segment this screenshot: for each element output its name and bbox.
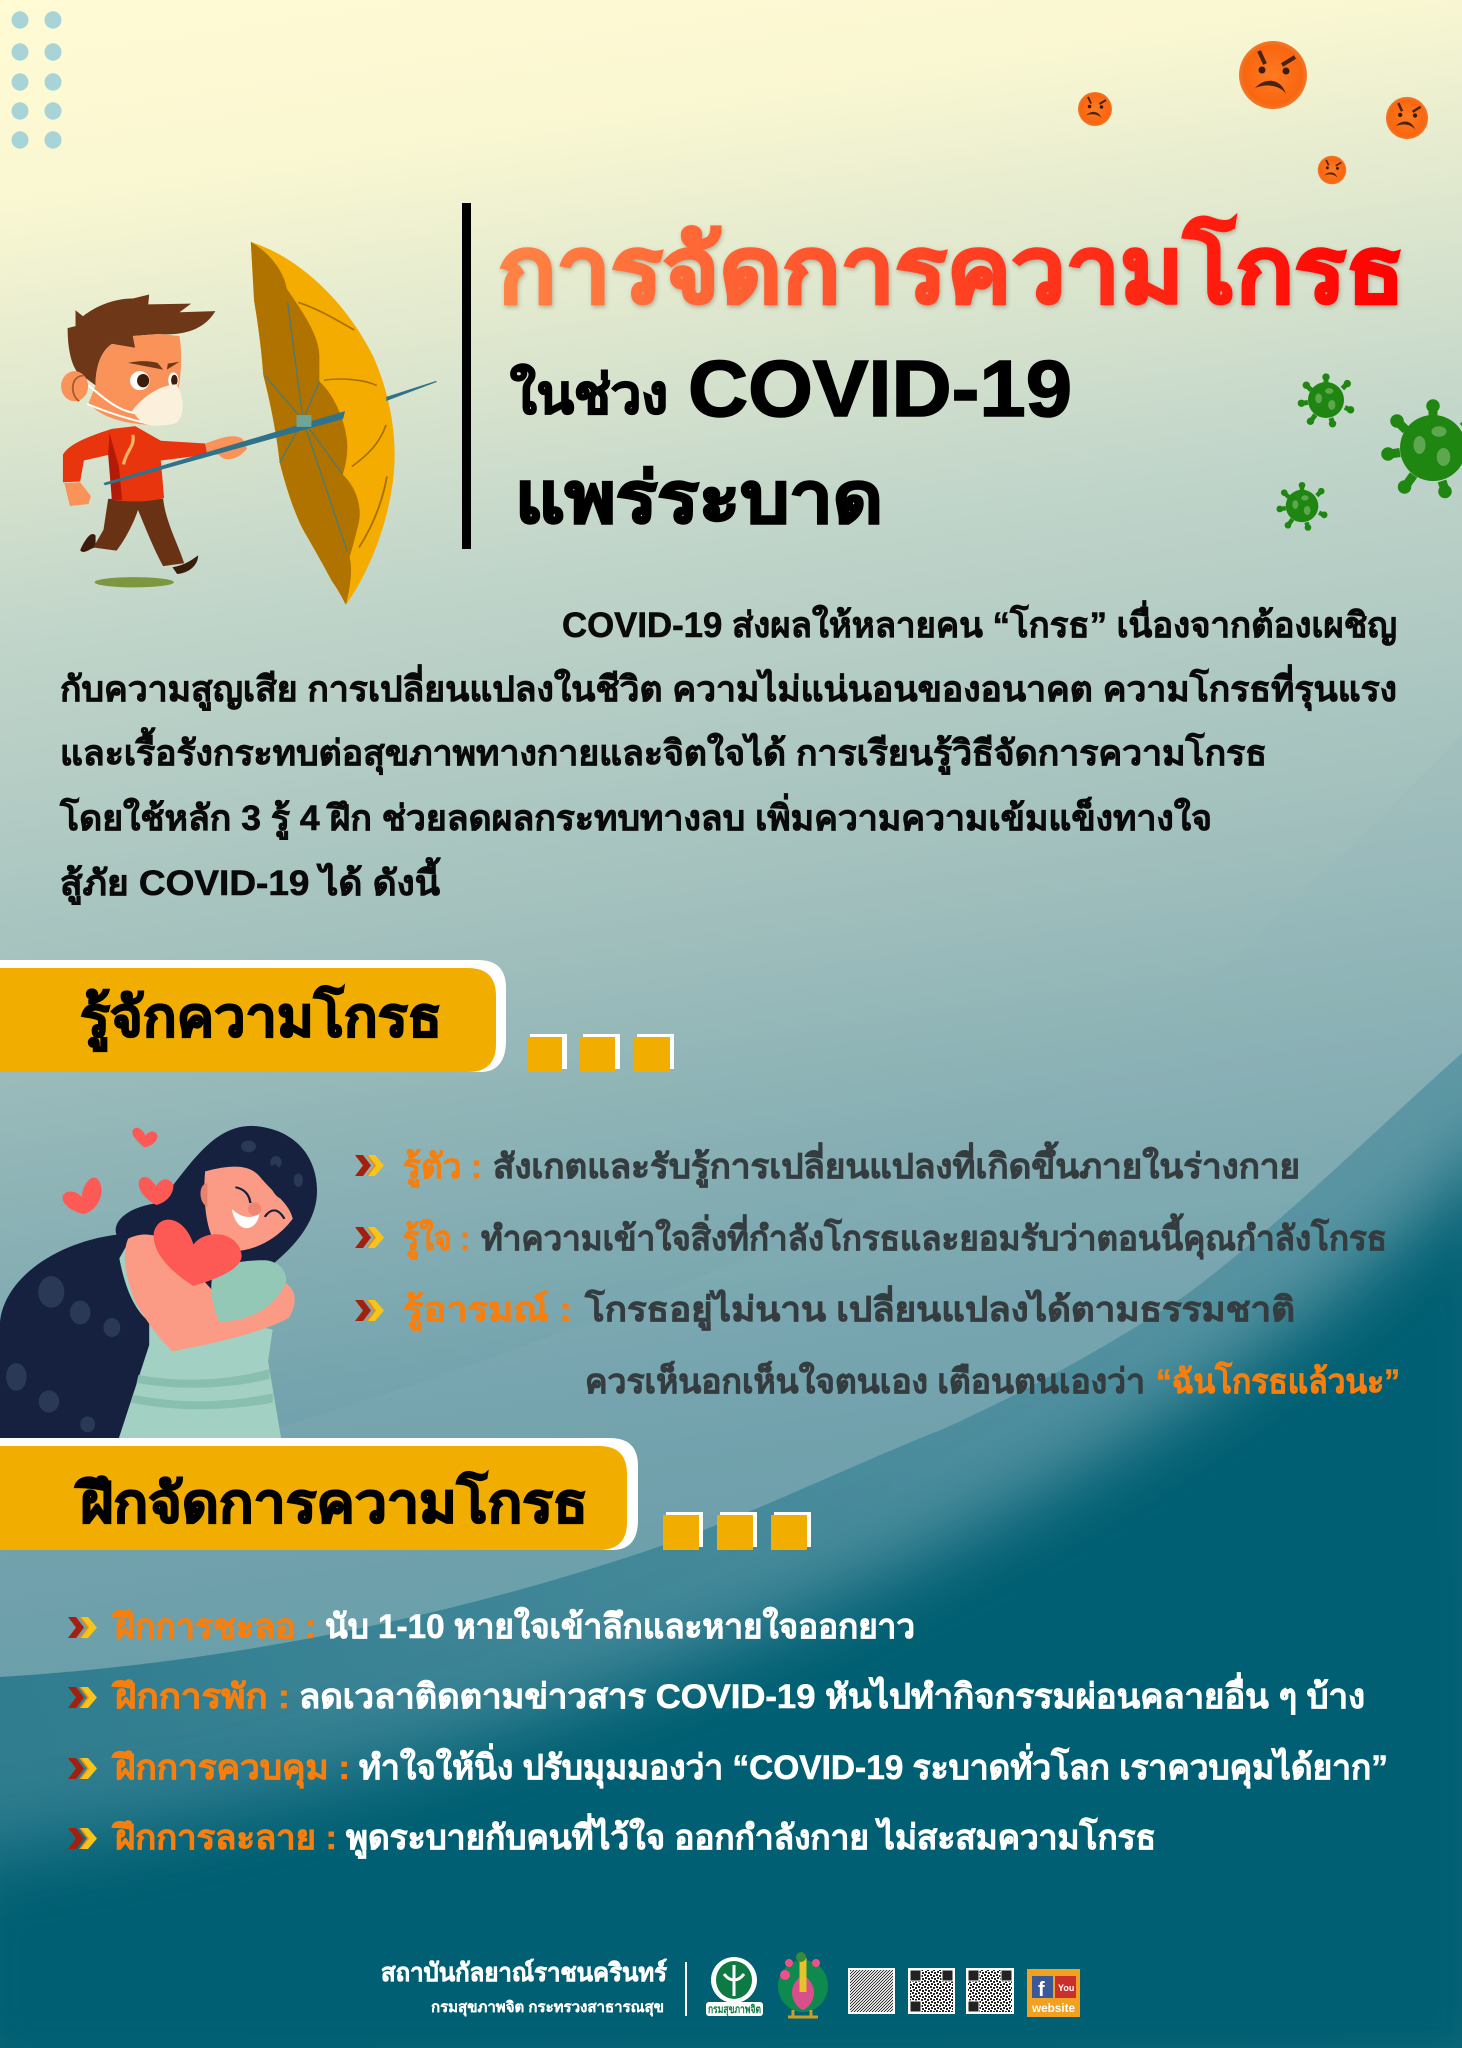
icon: social media website box: website <box>1031 2001 1075 2015</box>
text block: introduction: กับความสูญเสีย การเปลี่ยนแปลงในชีวิต ความไม่แน่นอนของอนาคต ความโกรธที่รุนแรง <box>60 664 1397 711</box>
heading: know your anger: รู้จักความโกรธ <box>80 985 442 1052</box>
item: know mind: รู้ใจ : <box>403 1218 470 1260</box>
item: rest: ฝึกการพัก : <box>111 1678 290 1716</box>
text block: introduction: COVID-19 ส่งผลให้หลายคน “โกรธ” เนื่องจากต้องเผชิญ <box>562 600 1397 646</box>
icon: social media website box: f <box>1038 1979 1045 2001</box>
decorative dots <box>12 11 62 149</box>
item: know emotion: รู้อารมณ์ : <box>403 1290 572 1331</box>
list: know your anger items <box>355 1141 1400 1401</box>
icon: green viruses <box>1276 373 1462 531</box>
item: release: พูดระบายกับคนที่ไว้ใจ ออกกำลังกาย ไม่สะสมความโกรธ <box>346 1813 1156 1859</box>
item: know emotion: โกรธอยู่ไม่นาน เปลี่ยนแปลงได้ตามธรรมชาติ <box>584 1285 1295 1331</box>
text block: introduction: โดยใช้หลัก 3 รู้ 4 ฝึก ช่วยลดผลกระทบทางลบ เพิ่มความความเข้มแข็งทางใจ <box>59 793 1212 840</box>
illustration: woman hugging heart <box>0 1126 317 1438</box>
footer <box>381 1952 1080 2017</box>
icon: three squares <box>527 1034 674 1072</box>
item: know body: รู้ตัว : <box>403 1148 482 1188</box>
item: slow down: นับ 1-10 หายใจเข้าลึกและหายใจออกยาว <box>325 1606 915 1646</box>
list: practice items <box>68 1606 1388 1859</box>
panel: practice anger management banner <box>0 1438 811 1550</box>
text block: introduction: และเรื้อรังกระทบต่อสุขภาพทางกายและจิตใจได้ การเรียนรู้วิธีจัดการความโกรธ <box>60 727 1267 775</box>
text block: introduction <box>59 600 1397 905</box>
icon: angry emoji faces <box>1078 41 1428 184</box>
heading: outbreak: แพร่ระบาด <box>515 459 883 537</box>
text: institute name: สถาบันกัลยาณ์ราชนครินทร์ <box>381 1958 668 1987</box>
item: know emotion <box>355 1285 1400 1401</box>
item: slow down: ฝึกการชะลอ : <box>111 1608 316 1646</box>
heading: main title: การจัดการความโกรธ <box>498 216 1405 322</box>
text block: introduction: สู้ภัย COVID-19 ได้ ดังนี้ <box>60 857 441 905</box>
item: know emotion: ควรเห็นอกเห็นใจตนเอง เตือนตนเองว่า <box>585 1360 1145 1401</box>
item: release <box>68 1813 1156 1859</box>
item: control: ทำใจให้นิ่ง ปรับมุมมองว่า “COVID-19 ระบาดทั่วโลก เราควบคุมได้ยาก” <box>359 1743 1388 1789</box>
heading: during: ในช่วง <box>510 363 668 425</box>
icon: QR code 1 <box>848 1968 895 2014</box>
divider: vertical title bar <box>462 203 471 549</box>
icon: social media website box: You <box>1058 1983 1074 1993</box>
icon: peacock mascot <box>778 1952 828 2017</box>
item: know body: สังเกตและรับรู้การเปลี่ยนแปลงที่เกิดขึ้นภายในร่างกาย <box>493 1141 1300 1188</box>
item: know mind <box>355 1213 1387 1260</box>
item: rest <box>68 1672 1365 1716</box>
icon: department logo <box>706 1957 763 2017</box>
item: control <box>68 1743 1388 1789</box>
item: know body <box>355 1141 1300 1188</box>
illustration: boy in mask with umbrella <box>61 242 436 605</box>
title <box>498 216 1405 537</box>
item: know mind: ทำความเข้าใจสิ่งที่กำลังโกรธและยอมรับว่าตอนนี้คุณกำลังโกรธ <box>481 1213 1387 1260</box>
item: rest: ลดเวลาติดตามข่าวสาร COVID-19 หันไปทำกิจกรรมผ่อนคลายอื่น ๆ บ้าง <box>299 1672 1365 1716</box>
icon: department logo: กรมสุขภาพจิต <box>708 2003 761 2017</box>
text: department: กรมสุขภาพจิต กระทรวงสาธารณสุข <box>431 1998 664 2017</box>
icon: social media website box <box>1027 1969 1080 2017</box>
heading: COVID-19: COVID-19 <box>688 344 1072 433</box>
icon: three squares <box>663 1512 811 1550</box>
heading: practice anger management: ฝึกจัดการความโกรธ <box>74 1471 588 1534</box>
item: control: ฝึกการควบคุม : <box>111 1749 350 1789</box>
item: know emotion: “ฉันโกรธแล้วนะ” <box>1156 1361 1400 1401</box>
item: slow down <box>68 1606 915 1646</box>
icon: QR code 2 <box>908 1968 955 2014</box>
icon: QR code 3 <box>966 1968 1014 2014</box>
item: release: ฝึกการละลาย : <box>111 1819 337 1857</box>
panel: know your anger banner <box>0 960 674 1072</box>
